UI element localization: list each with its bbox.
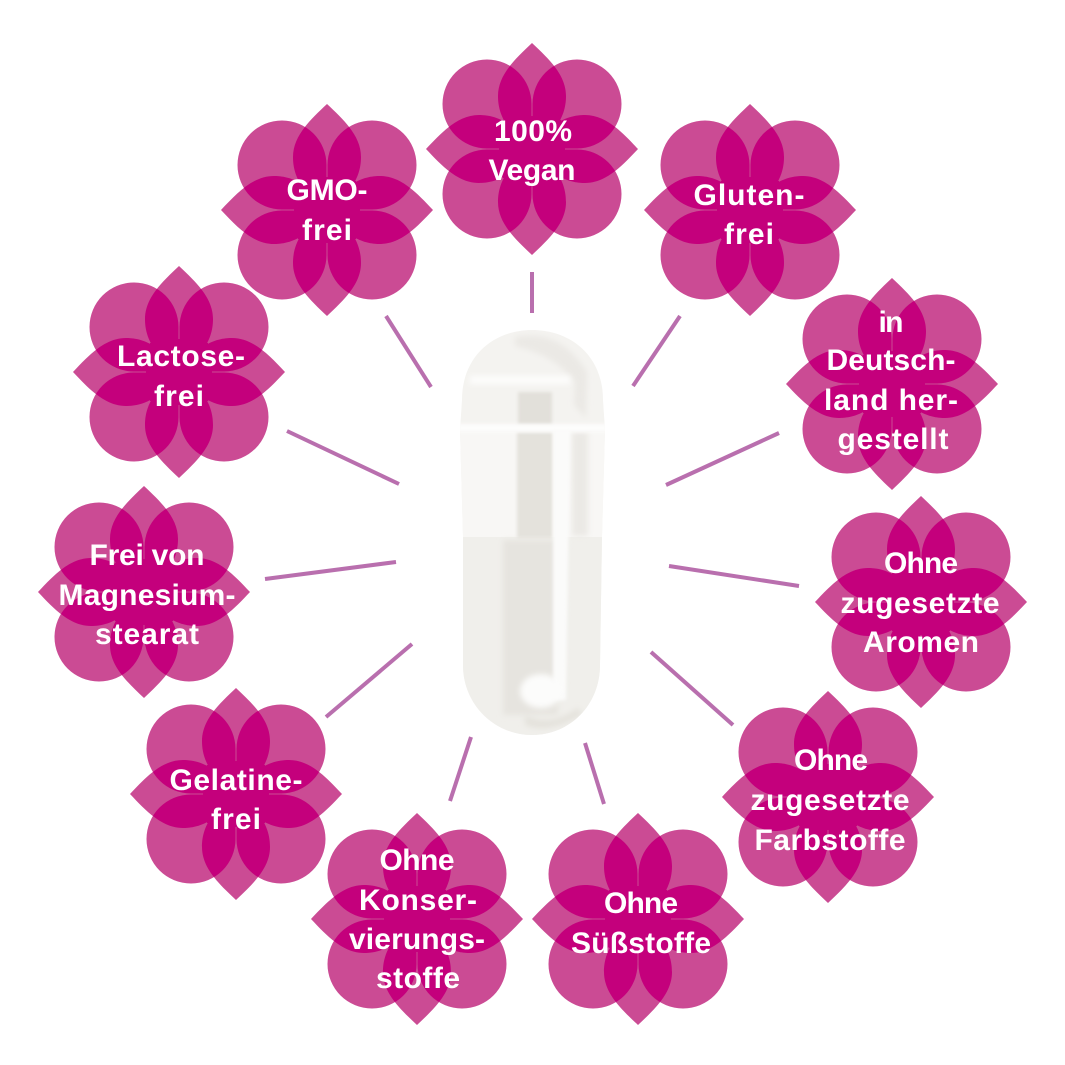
flower: GMO-frei: frei (302, 214, 352, 247)
flower: Glutenfrei: frei (724, 218, 774, 251)
flower: Lactosefrei: frei (154, 380, 204, 413)
capsule (455, 330, 610, 742)
flower: Ohne Konservierungsstoffe: vierungs- (349, 923, 485, 956)
flower: Frei von Magnesiumstearat: stearat (95, 618, 199, 651)
flower: Ohne Süßstoffe (532, 813, 744, 1025)
flower: 100% Vegan (426, 43, 638, 255)
flower: Ohne zugesetzte Aromen: zugesetzte (840, 587, 1000, 620)
flower: in Deutschland hergestellt: gestellt (838, 423, 948, 456)
flower: Ohne zugesetzte Farbstoffe: Ohne (794, 744, 868, 777)
flower: Gelatinefrei (130, 688, 342, 900)
flower: 100% Vegan: 100% (494, 115, 572, 148)
flower: Ohne zugesetzte Farbstoffe (722, 691, 934, 903)
flower: Frei von Magnesiumstearat: Magnesium- (58, 579, 236, 612)
connector lines (265, 272, 799, 804)
flower: Ohne zugesetzte Aromen: Ohne (884, 547, 958, 580)
flower: Ohne zugesetzte Aromen: Aromen (863, 626, 979, 659)
flower: in Deutschland hergestellt: in (878, 306, 904, 339)
flower: in Deutschland hergestellt: Deutsch- (826, 344, 956, 377)
flower: Glutenfrei (644, 104, 856, 316)
flower: GMO-frei (221, 104, 433, 316)
flower: Ohne Konservierungsstoffe (311, 813, 523, 1025)
flower: Ohne Konservierungsstoffe: Ohne (380, 844, 454, 877)
flower: Gelatinefrei: frei (211, 803, 261, 836)
flower: GMO-frei: GMO- (286, 174, 368, 207)
flower: 100% Vegan: Vegan (488, 154, 576, 187)
flower: Frei von Magnesiumstearat: Frei von (90, 539, 204, 572)
flower: Ohne Konservierungsstoffe: Konser- (359, 884, 477, 917)
flower: in Deutschland hergestellt: land her- (824, 384, 958, 417)
flower: Gelatinefrei: Gelatine- (170, 764, 302, 797)
flower: Ohne Konservierungsstoffe: stoffe (376, 962, 460, 995)
flower: Lactosefrei: Lactose- (117, 340, 245, 373)
flower: Ohne Süßstoffe: Ohne (604, 887, 678, 920)
flower: Frei von Magnesiumstearat (38, 486, 250, 698)
flower: Ohne zugesetzte Aromen (815, 496, 1027, 708)
flower: Lactosefrei (73, 266, 285, 478)
flower: Ohne zugesetzte Farbstoffe: zugesetzte (750, 784, 910, 817)
flower: Ohne zugesetzte Farbstoffe: Farbstoffe (754, 824, 906, 857)
flower: in Deutschland hergestellt (786, 278, 998, 490)
flower: Glutenfrei: Gluten- (694, 179, 804, 212)
flower: Ohne Süßstoffe: Süßstoffe (571, 927, 711, 960)
